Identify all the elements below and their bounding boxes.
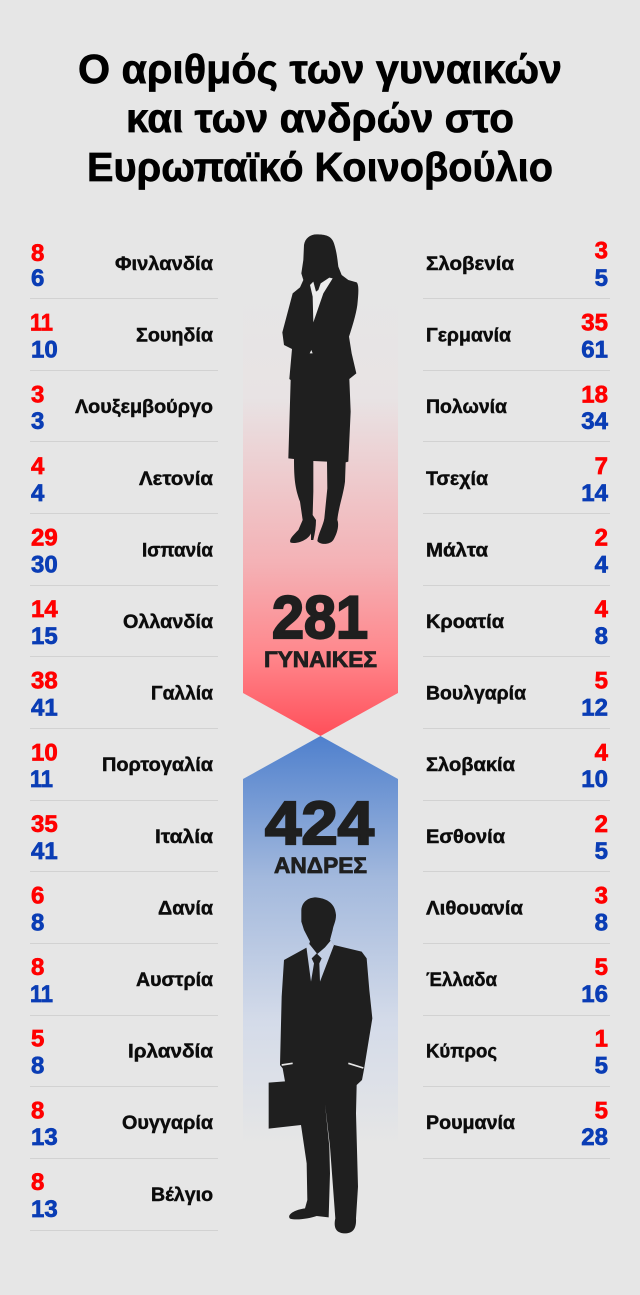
row: Malta: 4 bbox=[595, 551, 609, 578]
row: Sweden bbox=[30, 310, 218, 370]
row: France bbox=[30, 668, 218, 728]
row: Estonia bbox=[423, 811, 610, 872]
row: Latvia: 4 bbox=[31, 480, 45, 507]
row: Czechia: 7 bbox=[595, 453, 608, 480]
row: Hungary: 13 bbox=[31, 1124, 58, 1151]
row: Sweden: 11 bbox=[30, 310, 53, 337]
row: Lithuania bbox=[423, 882, 610, 944]
panel: right country list bbox=[423, 238, 610, 1158]
row: Slovakia: 10 bbox=[581, 766, 608, 793]
women total: ΓΥΝΑΙΚΕΣ bbox=[264, 647, 377, 672]
row: Ireland: 8 bbox=[31, 1053, 44, 1080]
row: Luxembourg: 3 bbox=[31, 381, 44, 408]
row: France: 38 bbox=[31, 668, 58, 695]
row: France: Γαλλία bbox=[151, 684, 213, 705]
row: Ireland: 5 bbox=[31, 1026, 44, 1053]
row: Luxembourg: 3 bbox=[31, 408, 44, 435]
row: Netherlands: 14 bbox=[31, 596, 58, 623]
women total bbox=[264, 584, 377, 672]
row: Portugal: 11 bbox=[30, 766, 53, 793]
row: Denmark: Δανία bbox=[158, 898, 213, 919]
row: Poland bbox=[423, 381, 610, 442]
title: Ο αριθμός των γυναικών bbox=[78, 46, 562, 92]
row: Austria: 8 bbox=[31, 954, 44, 981]
title: Ευρωπαϊκό Κοινοβούλιο bbox=[87, 144, 553, 190]
row: Estonia: 2 bbox=[595, 811, 608, 838]
row: Slovenia: 3 bbox=[595, 238, 608, 264]
icon: man silhouette bbox=[269, 897, 372, 1233]
row: Belgium bbox=[30, 1169, 218, 1230]
row: Greece: 5 bbox=[595, 954, 608, 981]
row: Italy bbox=[30, 811, 218, 872]
row: Germany: Γερμανία bbox=[426, 326, 511, 347]
row: Spain: 30 bbox=[31, 551, 58, 578]
row: Romania: Ρουμανία bbox=[426, 1113, 515, 1134]
row: Poland: 18 bbox=[581, 381, 608, 408]
women total: 281 bbox=[272, 584, 368, 651]
row: Netherlands: Ολλανδία bbox=[123, 612, 213, 633]
row: Malta: 2 bbox=[595, 524, 608, 552]
row: Belgium: 8 bbox=[31, 1169, 44, 1196]
row: Belgium: Βέλγιο bbox=[151, 1185, 213, 1206]
row: Malta bbox=[423, 524, 610, 586]
men total: 424 bbox=[265, 789, 374, 857]
row: Finland: Φινλανδία bbox=[115, 254, 213, 275]
row: Austria: Αυστρία bbox=[136, 970, 213, 991]
row: Austria bbox=[30, 954, 218, 1016]
row: Netherlands: 15 bbox=[31, 623, 58, 650]
row: Czechia: Τσεχία bbox=[426, 469, 488, 490]
row: Romania: 28 bbox=[581, 1124, 608, 1151]
row: Ireland: Ιρλανδία bbox=[128, 1042, 213, 1063]
row: Estonia: 5 bbox=[595, 838, 608, 865]
row: Cyprus: 1 bbox=[595, 1026, 608, 1053]
row: Lithuania: 3 bbox=[595, 882, 608, 910]
row: Poland: 34 bbox=[581, 408, 609, 435]
row: Slovakia bbox=[423, 739, 610, 800]
row: Estonia: Εσθονία bbox=[426, 827, 505, 848]
row: Spain: Ισπανία bbox=[142, 540, 213, 561]
row: Poland: Πολωνία bbox=[426, 397, 507, 418]
row: Finland bbox=[30, 240, 218, 298]
row: Portugal: 10 bbox=[31, 739, 58, 766]
title: και των ανδρών στο bbox=[126, 95, 514, 141]
title bbox=[78, 46, 562, 190]
row: Germany: 35 bbox=[581, 310, 608, 337]
row: Slovenia: 5 bbox=[595, 265, 608, 292]
row: Austria: 11 bbox=[30, 981, 53, 1008]
row: Portugal: Πορτογαλία bbox=[102, 755, 213, 776]
row: Slovenia bbox=[423, 238, 610, 298]
row: Lithuania: 8 bbox=[595, 909, 608, 936]
row: Slovakia: 4 bbox=[595, 739, 609, 766]
row: Croatia: Κροατία bbox=[426, 612, 504, 633]
row: Croatia: 4 bbox=[595, 596, 609, 623]
row: Bulgaria bbox=[423, 668, 610, 728]
row: Latvia: Λετονία bbox=[139, 469, 213, 490]
row: Croatia bbox=[423, 596, 610, 656]
row: Denmark bbox=[30, 882, 218, 944]
row: Slovakia: Σλοβακία bbox=[426, 755, 515, 776]
row: Hungary bbox=[30, 1097, 218, 1158]
row: Romania bbox=[423, 1097, 610, 1158]
row: Italy: Ιταλία bbox=[155, 827, 213, 848]
row: France: 41 bbox=[31, 695, 58, 722]
row: Luxembourg: Λουξεμβούργο bbox=[75, 397, 213, 418]
row: Greece bbox=[423, 954, 610, 1016]
row: Hungary: 8 bbox=[31, 1097, 44, 1124]
row: Hungary: Ουγγαρία bbox=[122, 1113, 213, 1134]
row: Italy: 35 bbox=[31, 811, 58, 838]
row: Luxembourg bbox=[30, 381, 218, 442]
row: Denmark: 8 bbox=[31, 909, 44, 936]
row: Czechia bbox=[423, 453, 610, 514]
icon: woman silhouette bbox=[282, 234, 358, 544]
panel: left country list bbox=[30, 240, 218, 1230]
row: Portugal bbox=[30, 739, 218, 800]
row: Greece: 16 bbox=[581, 981, 608, 1008]
row: Sweden: 10 bbox=[31, 337, 58, 364]
row: Cyprus: Κύπρος bbox=[426, 1042, 497, 1063]
row: Slovenia: Σλοβενία bbox=[426, 254, 514, 275]
row: Finland: 6 bbox=[31, 265, 44, 292]
row: Malta: Μάλτα bbox=[426, 540, 488, 561]
row: Lithuania: Λιθουανία bbox=[426, 898, 523, 919]
row: Sweden: Σουηδία bbox=[136, 326, 213, 347]
row: Germany bbox=[423, 310, 610, 370]
panel: women arrow band bbox=[243, 285, 398, 736]
row: Netherlands bbox=[30, 596, 218, 656]
row: Romania: 5 bbox=[595, 1097, 608, 1124]
row: Czechia: 14 bbox=[581, 480, 609, 507]
row: Spain bbox=[30, 524, 218, 586]
row: Cyprus: 5 bbox=[595, 1053, 608, 1080]
row: Finland: 8 bbox=[31, 240, 44, 267]
row: Bulgaria: Βουλγαρία bbox=[426, 684, 526, 705]
row: Spain: 29 bbox=[31, 524, 58, 552]
row: Cyprus bbox=[423, 1026, 610, 1086]
row: Latvia: 4 bbox=[31, 453, 45, 480]
panel: men arrow band bbox=[243, 736, 398, 1145]
row: Ireland bbox=[30, 1026, 218, 1086]
row: Croatia: 8 bbox=[595, 623, 608, 650]
row: Greece: Έλλαδα bbox=[426, 970, 497, 991]
row: Italy: 41 bbox=[31, 838, 58, 865]
row: Denmark: 6 bbox=[31, 882, 44, 910]
row: Latvia bbox=[30, 453, 218, 514]
row: Bulgaria: 12 bbox=[581, 695, 608, 722]
men total: ΑΝΔΡΕΣ bbox=[274, 853, 367, 878]
row: Bulgaria: 5 bbox=[595, 668, 608, 695]
row: Germany: 61 bbox=[581, 337, 608, 364]
row: Belgium: 13 bbox=[31, 1196, 58, 1223]
